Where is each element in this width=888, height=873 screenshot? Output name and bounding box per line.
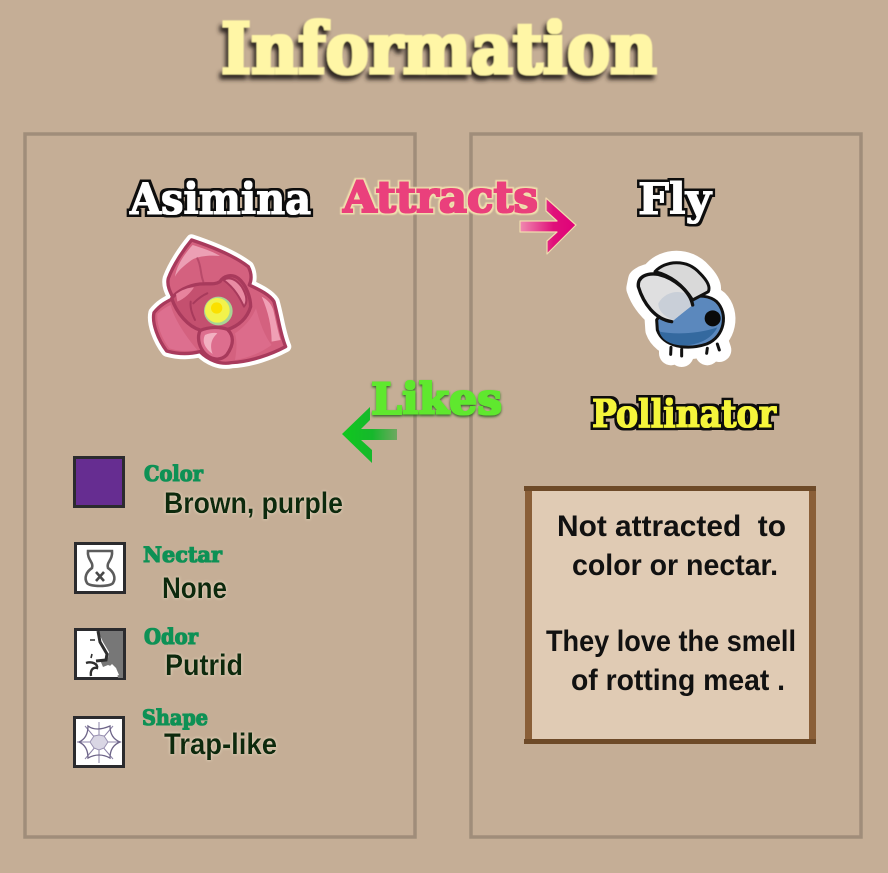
heading: Asimina: Asimina [129, 175, 311, 225]
icon: fly [638, 263, 723, 356]
arrow: likes [342, 407, 397, 463]
trait: shape [74, 705, 277, 766]
title: Information [221, 7, 657, 90]
trait: nectar [76, 542, 227, 605]
note text: Not attracted to [557, 510, 786, 543]
panel: pollinator [471, 134, 861, 837]
value: Putrid: Putrid [165, 649, 243, 682]
trait: color [74, 458, 343, 520]
label: Likes: Likes [371, 375, 502, 425]
value: Trap-like: Trap-like [164, 728, 277, 761]
label: Attracts: Attracts [342, 173, 538, 223]
note text [546, 510, 796, 697]
value: Brown, purple: Brown, purple [164, 487, 343, 520]
label: Odor: Odor [144, 624, 199, 649]
note text: They love the smell [546, 625, 796, 658]
trait: odor [76, 624, 243, 682]
label: Color: Color [144, 461, 204, 486]
icon: color swatch [74, 458, 124, 506]
note board [524, 486, 816, 744]
icon: asimina flower [154, 240, 286, 363]
panel: plant [25, 134, 415, 837]
heading: Fly: Fly [638, 175, 713, 225]
value: None: None [162, 572, 227, 605]
icon: empty nectar vessel [76, 544, 124, 592]
arrow: attracts [520, 198, 576, 254]
note text: color or nectar. [572, 549, 778, 582]
note text: of rotting meat . [571, 664, 785, 697]
icon: spider web [74, 718, 124, 766]
label: Pollinator: Pollinator [592, 391, 777, 436]
label: Nectar: Nectar [143, 542, 223, 567]
icon: nose smelling odor [76, 630, 124, 678]
label: Shape: Shape [142, 705, 208, 730]
